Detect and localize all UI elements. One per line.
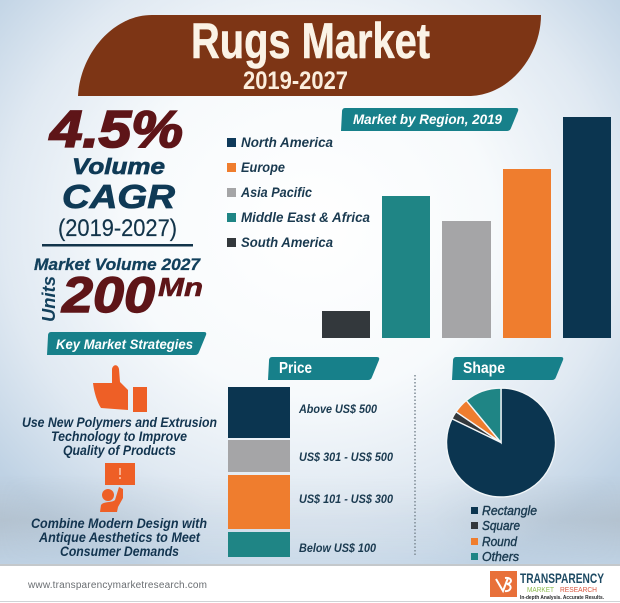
strategy text: modern design — [31, 515, 207, 559]
slice: others — [466, 388, 501, 442]
region legend — [227, 134, 370, 250]
logo tagline: In-depth Analysis. Accurate Results. — [520, 595, 604, 601]
strategy text: polymers: Use New Polymers and Extrusion — [22, 414, 217, 430]
region legend: North America — [241, 134, 333, 150]
icon: person holding sign — [100, 463, 135, 512]
bar chart: market by region — [322, 117, 611, 338]
region legend: South America — [241, 234, 333, 250]
bar: North America — [563, 117, 611, 338]
CAGR value: 4.5% — [49, 101, 183, 159]
subtitle years: 2019-2027 — [243, 67, 348, 95]
banner: market by region: Market by Region, 2019 — [353, 111, 502, 127]
logo market research: MARKET — [527, 587, 555, 594]
icon: thumbs up — [93, 365, 147, 412]
strategy text: modern design: Consumer Demands — [60, 543, 179, 559]
price labels: US$ 301 - US$ 500 — [299, 452, 394, 464]
banner: key market strategies: Key Market Strategies — [56, 336, 193, 352]
footer website: www.transparencymarketresearch.com — [27, 580, 207, 591]
volume value: 200 — [61, 267, 155, 323]
shape legend: Square — [482, 518, 520, 533]
banner: market by region — [341, 108, 518, 131]
title banner — [78, 13, 541, 96]
shape legend: Rectangle — [482, 503, 537, 518]
strategy text: polymers: Quality of Products — [63, 442, 176, 458]
banner: shape: Shape — [463, 360, 505, 377]
banner: price: Price — [279, 360, 312, 377]
market volume heading: Market Volume 2027 — [34, 255, 202, 274]
region legend: Europe — [241, 159, 285, 175]
shape legend: Round — [482, 534, 518, 549]
slice: square — [452, 412, 501, 442]
logo market research: RESEARCH — [560, 587, 597, 594]
logo mark — [490, 571, 517, 597]
logo market research — [527, 587, 597, 594]
title: Rugs Market — [191, 13, 430, 69]
shape legend — [471, 503, 537, 564]
volume unit: Mn — [158, 272, 203, 302]
slice: rectangle — [447, 388, 556, 497]
CAGR stat block — [49, 101, 183, 242]
bar: Europe — [503, 169, 551, 338]
region legend: Asia Pacific — [240, 184, 312, 200]
strategy text: modern design: Antique Aesthetics to Meet — [38, 529, 201, 545]
market volume block — [34, 255, 203, 323]
CAGR label: CAGR — [62, 178, 175, 215]
strategy text: modern design: Combine Modern Design with — [31, 515, 207, 531]
bar: Middle East and Africa — [382, 196, 430, 338]
logo — [490, 570, 604, 601]
price labels — [298, 404, 394, 555]
price labels: Below US$ 100 — [299, 543, 377, 555]
bar: Asia Pacific — [442, 221, 491, 338]
region legend: Middle East & Africa — [241, 209, 370, 225]
banner: shape — [452, 357, 563, 380]
strategy text: polymers — [22, 414, 217, 458]
volume label: Volume — [72, 154, 165, 179]
shape legend: Others — [482, 549, 519, 564]
banner: key market strategies — [47, 332, 206, 355]
banner: price — [268, 357, 379, 380]
slice: round — [456, 400, 501, 442]
pie chart: shape — [447, 388, 556, 497]
stacked bar: price — [228, 387, 290, 557]
price labels: US$ 101 - US$ 300 — [299, 494, 394, 506]
CAGR period: (2019-2027) — [58, 215, 177, 242]
units label: Units — [39, 276, 59, 322]
bar: South America — [322, 311, 370, 338]
price labels: Above US$ 500 — [298, 404, 378, 416]
strategy text: polymers: Technology to Improve — [51, 428, 187, 444]
